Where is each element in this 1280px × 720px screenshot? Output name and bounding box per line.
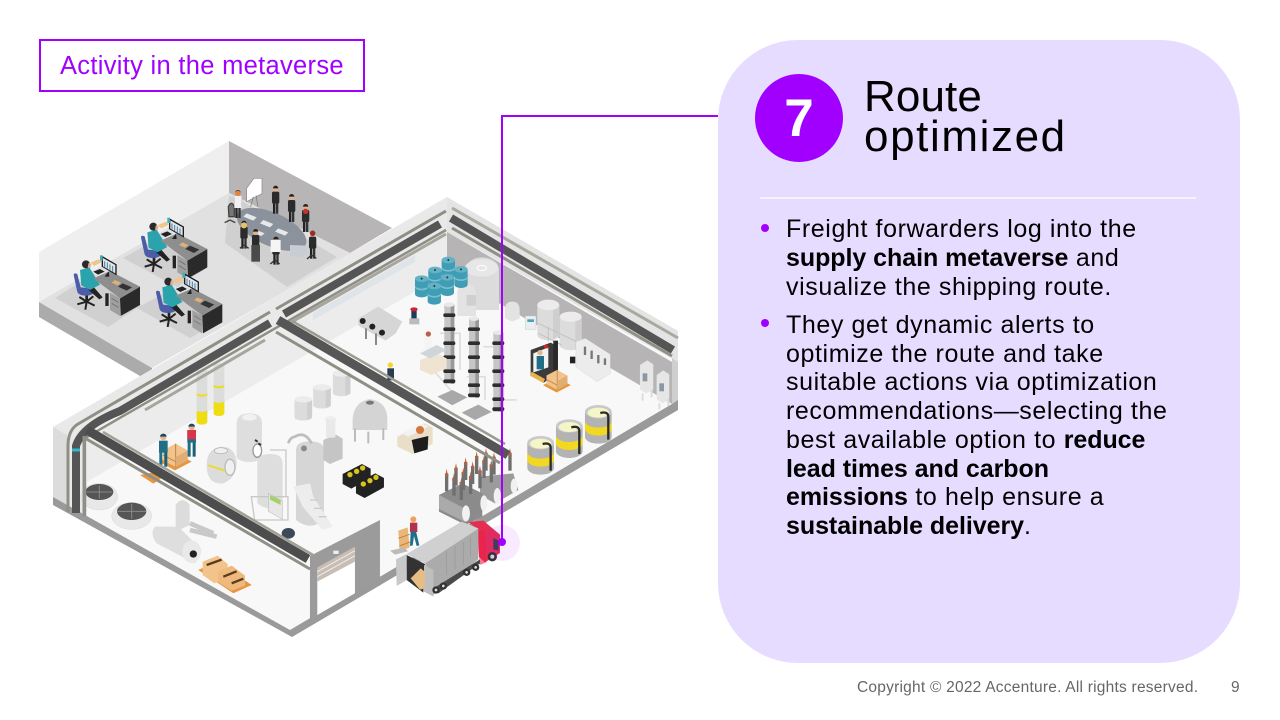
large gray tanks (457, 257, 520, 322)
divider (760, 197, 1196, 199)
worker with hand truck (390, 516, 419, 555)
overhead pipe racks (68, 208, 678, 569)
yellow-band tanks (527, 405, 612, 475)
bullet list 2: optimize the route and take (786, 340, 1104, 368)
heading: Route (864, 72, 982, 121)
factory shell (53, 197, 678, 637)
stacked parcels on pallet (198, 556, 252, 593)
wall control panels (640, 360, 669, 409)
truck (396, 521, 500, 597)
office desks and workers (74, 218, 222, 333)
bullet list 1: supply chain metaverse and (786, 244, 1119, 272)
storage tanks and control panel (525, 300, 582, 350)
heading (864, 72, 1067, 161)
step number badge: 7 (784, 89, 814, 148)
illustration: isometric office and factory (39, 141, 679, 637)
lab technician (420, 331, 447, 375)
office desk on factory floor (397, 423, 433, 454)
equipment: right hall (358, 257, 669, 420)
bullet list 2: emissions to help ensure a (786, 483, 1104, 511)
transformers (439, 448, 518, 525)
cooling fans (81, 483, 152, 529)
label: activity in the metaverse (39, 39, 365, 92)
bullet list 1: visualize the shipping route. (786, 273, 1112, 301)
black battery boxes (343, 464, 384, 498)
small tanks and dome (295, 370, 387, 443)
horizontal cylinders and valve (358, 307, 419, 345)
bullet list 2: lead times and carbon (786, 455, 1049, 483)
bullet list 2: recommendations—selecting the (786, 397, 1167, 425)
compressor (153, 500, 217, 563)
bullet list 2: They get dynamic alerts to (786, 311, 1095, 339)
pressure tanks (207, 413, 343, 539)
panel: route optimized (718, 40, 1240, 663)
yellow columns (197, 363, 224, 425)
bullet list 2: suitable actions via optimization (786, 368, 1157, 396)
blue drums (415, 257, 468, 305)
workers with pallets (140, 424, 196, 484)
step number badge (755, 74, 843, 162)
bullet list 2 (761, 311, 1167, 540)
bullet list 2: sustainable delivery. (786, 512, 1032, 540)
equipment: left hall (81, 363, 387, 621)
label: activity in the metaverse: Activity in the metaverse (60, 52, 344, 80)
electrical cabinet (576, 338, 610, 382)
office room (39, 141, 395, 383)
forklift with cargo (530, 341, 575, 393)
page number: 9 (1231, 679, 1240, 696)
meeting table group (225, 178, 316, 265)
bullet list 1: Freight forwarders log into the (786, 215, 1137, 243)
bullet list 2: best available option to reduce (786, 426, 1145, 454)
equipment: front right (390, 405, 612, 597)
hard-hat worker (387, 362, 394, 380)
loading door (310, 520, 380, 621)
footer copyright: Copyright © 2022 Accenture. All rights reserved. (857, 679, 1198, 696)
distillation columns (433, 302, 517, 420)
bullet list 1 (761, 215, 1137, 301)
connector line and truck marker (484, 115, 718, 561)
heading: optimized (864, 112, 1067, 161)
